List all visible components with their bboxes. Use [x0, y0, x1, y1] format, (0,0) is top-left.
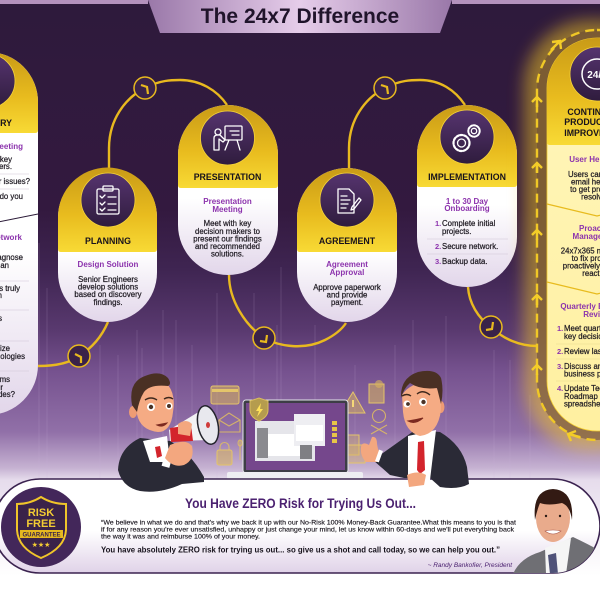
panel: presentation card: solutions. — [211, 250, 244, 258]
panel: implementation card: 2. — [435, 242, 441, 251]
guarantee quote — [101, 520, 516, 540]
panel: implementation card: 1. — [435, 219, 441, 228]
panel: implementation card: Backup data. — [442, 257, 488, 266]
panel: continuous improvement card: 1. — [557, 324, 563, 333]
heading: You Have ZERO Risk for Trying Us Out... — [185, 496, 416, 511]
connector: planning to presentation — [109, 77, 227, 168]
icon: document and pen — [338, 189, 361, 213]
icon: 24/7 clock — [582, 59, 600, 89]
panel: presentation card: Presentation — [203, 197, 252, 206]
panel: planning card: based on discovery — [74, 290, 142, 299]
panel: implementation card: 3. — [435, 257, 441, 266]
photo: president — [514, 489, 594, 573]
illustration: man with megaphone — [118, 373, 222, 492]
panel: implementation card — [417, 105, 517, 287]
badge: risk free guarantee: GUARANTEE — [22, 532, 61, 538]
panel: planning card: findings. — [93, 298, 123, 307]
panel: agreement card: Agreement — [326, 260, 368, 269]
attribution: ~ Randy Bankofier, President — [428, 562, 513, 569]
panel: agreement card: Approval — [330, 268, 364, 277]
panel: continuous improvement card: Roadmap — [564, 392, 598, 401]
badge: risk free guarantee: ★★★ — [32, 541, 50, 549]
illustration: floating security icons — [211, 380, 387, 465]
guarantee quote: “We believe in what we do and that's why we back it up with our No-Risk 100% Money-Back Guarantee.What this means to you is that — [101, 520, 516, 526]
panel: presentation card: decision makers to — [195, 227, 261, 236]
title banner: The 24x7 Difference — [201, 5, 399, 28]
panel: continuous improvement card: 4. — [557, 384, 563, 393]
panel: continuous improvement card: 2. — [557, 347, 563, 356]
panel: implementation card: Secure network. — [442, 242, 498, 251]
panel: planning card: PLANNING — [85, 236, 131, 246]
panel: implementation card: IMPLEMENTATION — [428, 172, 506, 182]
panel: planning card: Senior Engineers — [78, 275, 138, 284]
guarantee quote: the way it was and reimburse 100% of your money. — [101, 534, 260, 540]
panel: planning card: Design Solution — [78, 260, 139, 269]
icon: clipboard — [97, 186, 119, 214]
connector: implementation to continuous improvement — [468, 287, 537, 346]
panel: presentation card: and recommended — [195, 242, 260, 251]
illustration: man with thumbs up — [361, 371, 469, 488]
panel: presentation card: PRESENTATION — [194, 172, 261, 182]
badge: risk free guarantee: FREE — [26, 518, 56, 530]
panel: agreement card: payment. — [331, 298, 363, 307]
bold statement: You have absolutely ZERO risk for trying us out... so give us a shot and call today, so we can help you out.” — [101, 546, 500, 554]
panel: implementation card: Onboarding — [444, 204, 490, 213]
panel: discovery card: r — [0, 383, 3, 392]
panel: presentation card: present our findings — [193, 234, 262, 244]
panel: planning card — [58, 167, 157, 322]
panel: presentation card — [178, 105, 278, 275]
panel: agreement card: AGREEMENT — [319, 236, 376, 246]
connector: presentation to agreement — [229, 275, 346, 349]
panel: agreement card: and provide — [327, 290, 367, 300]
panel: planning card: develop solutions — [78, 282, 138, 292]
badge: risk free guarantee — [1, 487, 81, 567]
panel: continuous improvement card: 3. — [557, 362, 563, 371]
illustration: laptop — [227, 398, 363, 479]
icon: presenter at board — [214, 126, 242, 150]
panel: continuous improvement card — [524, 20, 600, 450]
panel: zero risk guarantee — [0, 479, 600, 580]
badge: risk free guarantee: RISK — [28, 507, 54, 519]
panel: implementation card: projects. — [442, 227, 471, 236]
panel: discovery card: ize — [0, 344, 10, 353]
connector: agreement to implementation — [349, 77, 465, 168]
panel: implementation card: Complete initial — [442, 219, 496, 228]
icon: gears — [454, 125, 480, 151]
panel: agreement card: Approve paperwork — [313, 283, 381, 292]
connector: discovery to planning — [38, 322, 108, 367]
panel: implementation card: 1 to 30 Day — [446, 197, 489, 206]
panel: presentation card: Meeting — [212, 205, 243, 214]
panel: agreement card — [297, 168, 397, 322]
panel: discovery card — [0, 52, 38, 415]
title banner — [0, 0, 600, 33]
arrows on dashed loop — [532, 41, 580, 441]
panel: presentation card: Meet with key — [204, 219, 251, 228]
guarantee quote: if for any reason you're ever unsatisfied, unhappy or just change your mind, let us know within 60-days and we'll put everything back — [101, 526, 515, 534]
